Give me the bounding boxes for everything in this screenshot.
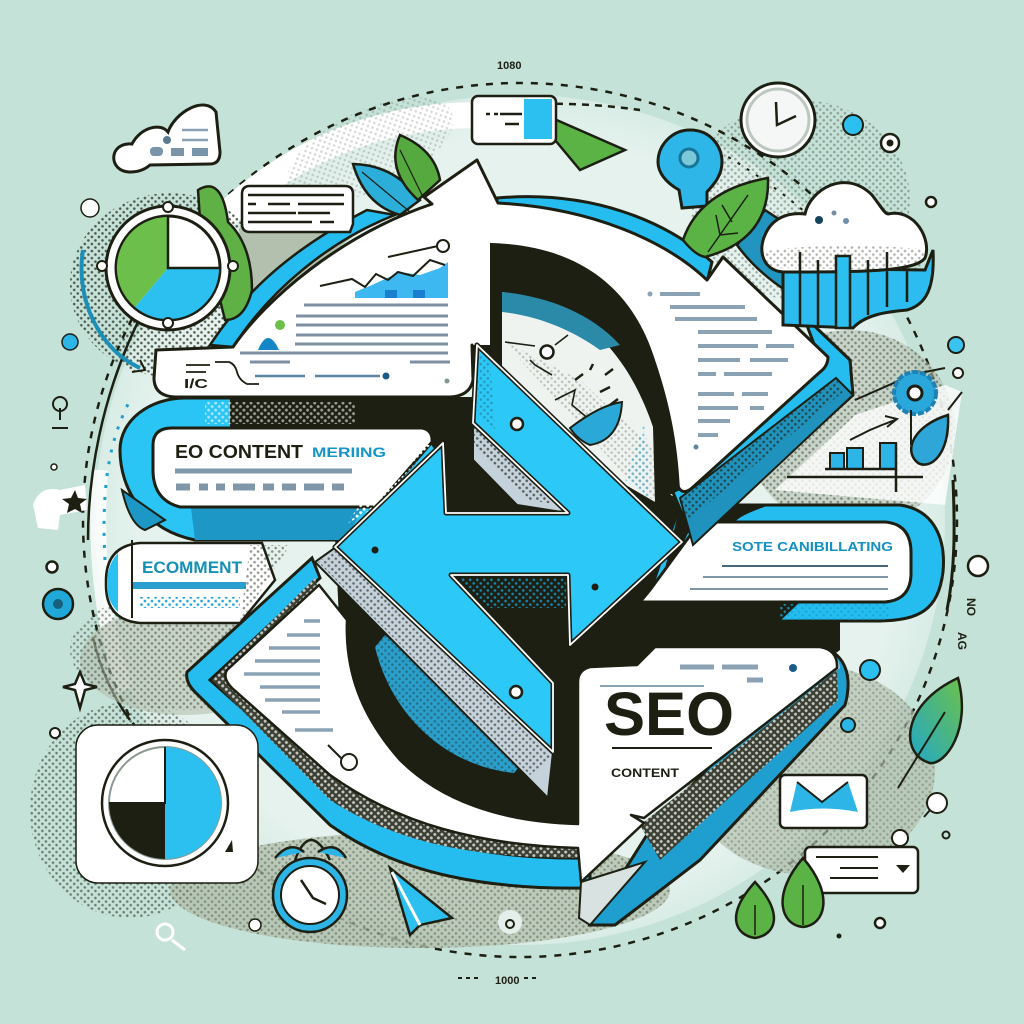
text lines [240,305,450,376]
icon: cloud tag top left [114,105,220,172]
outer orbit rings [83,83,957,957]
left small marks [33,334,97,738]
icon: cloud with bars [762,183,933,328]
dark arch [473,243,680,515]
icon: blue wedge behind leaf [737,210,795,290]
central blue arrow mark [315,345,682,798]
content label: CONTENT [611,766,680,780]
icon: envelope [780,775,867,828]
mini line chart [320,240,449,298]
panel: left banner [120,398,470,540]
right blue border [590,647,848,925]
banner white label: MERIING [312,444,386,460]
panel: ecomment box [106,540,290,623]
icon: right leaf [898,678,962,788]
white crescent [225,585,837,882]
black fill beside arrow [432,397,473,515]
magnifier pin [328,745,357,770]
panel: bottom crescent [187,558,848,925]
label 1000: 1000 [495,975,519,987]
pins [511,418,523,430]
left page text [244,621,333,730]
icon: bottom leaves [736,858,823,938]
bottom marks [157,910,522,950]
icon: gear and drop [894,372,962,465]
halftone shadows [30,76,955,948]
text: AG [955,632,969,650]
speech bubble top left [242,186,353,232]
right page text [660,294,794,435]
blue left band [210,210,395,347]
top badge with ribbon [472,96,625,170]
panel: ecomment box: ECOMMENT [142,559,242,577]
banner white label: EO CONTENT [175,442,303,462]
blue top band [497,197,712,282]
inner crescent [375,635,525,773]
banner white label [153,428,432,525]
panel: bottom-left pie card [76,725,258,883]
panel: right banner: SOTE CANIBILLATING [732,539,893,554]
icon: curved arrow left [81,199,145,372]
right small marks [836,556,988,938]
icon: pie dial top left [97,186,252,330]
icon: paper plane [390,868,452,935]
inner arch map [505,335,622,445]
top white swoosh [215,115,480,225]
black arc [347,590,578,824]
small glyph: I/C [184,376,209,391]
rotated side text: NO [964,598,978,616]
label 1080: 1080 [497,60,521,72]
SEO heading: SEO [604,680,734,748]
icon: clock [741,83,815,157]
panel: top arrow document [154,160,853,545]
icon: chat card [805,830,918,893]
small dots top right [843,115,964,378]
icon: bulb [658,130,722,208]
panel: right banner [640,505,943,621]
icon: leaves top center [353,135,440,215]
icon: green leaf right [683,178,768,257]
halftone inner edge [212,578,580,858]
blue left border [187,558,590,888]
chart: small bars right [775,368,962,505]
blue side of arrow [672,315,853,540]
icon: alarm clock [273,840,347,932]
gray faces [315,547,553,798]
small green dot and blue dome [258,320,285,350]
central black backing [300,397,840,835]
